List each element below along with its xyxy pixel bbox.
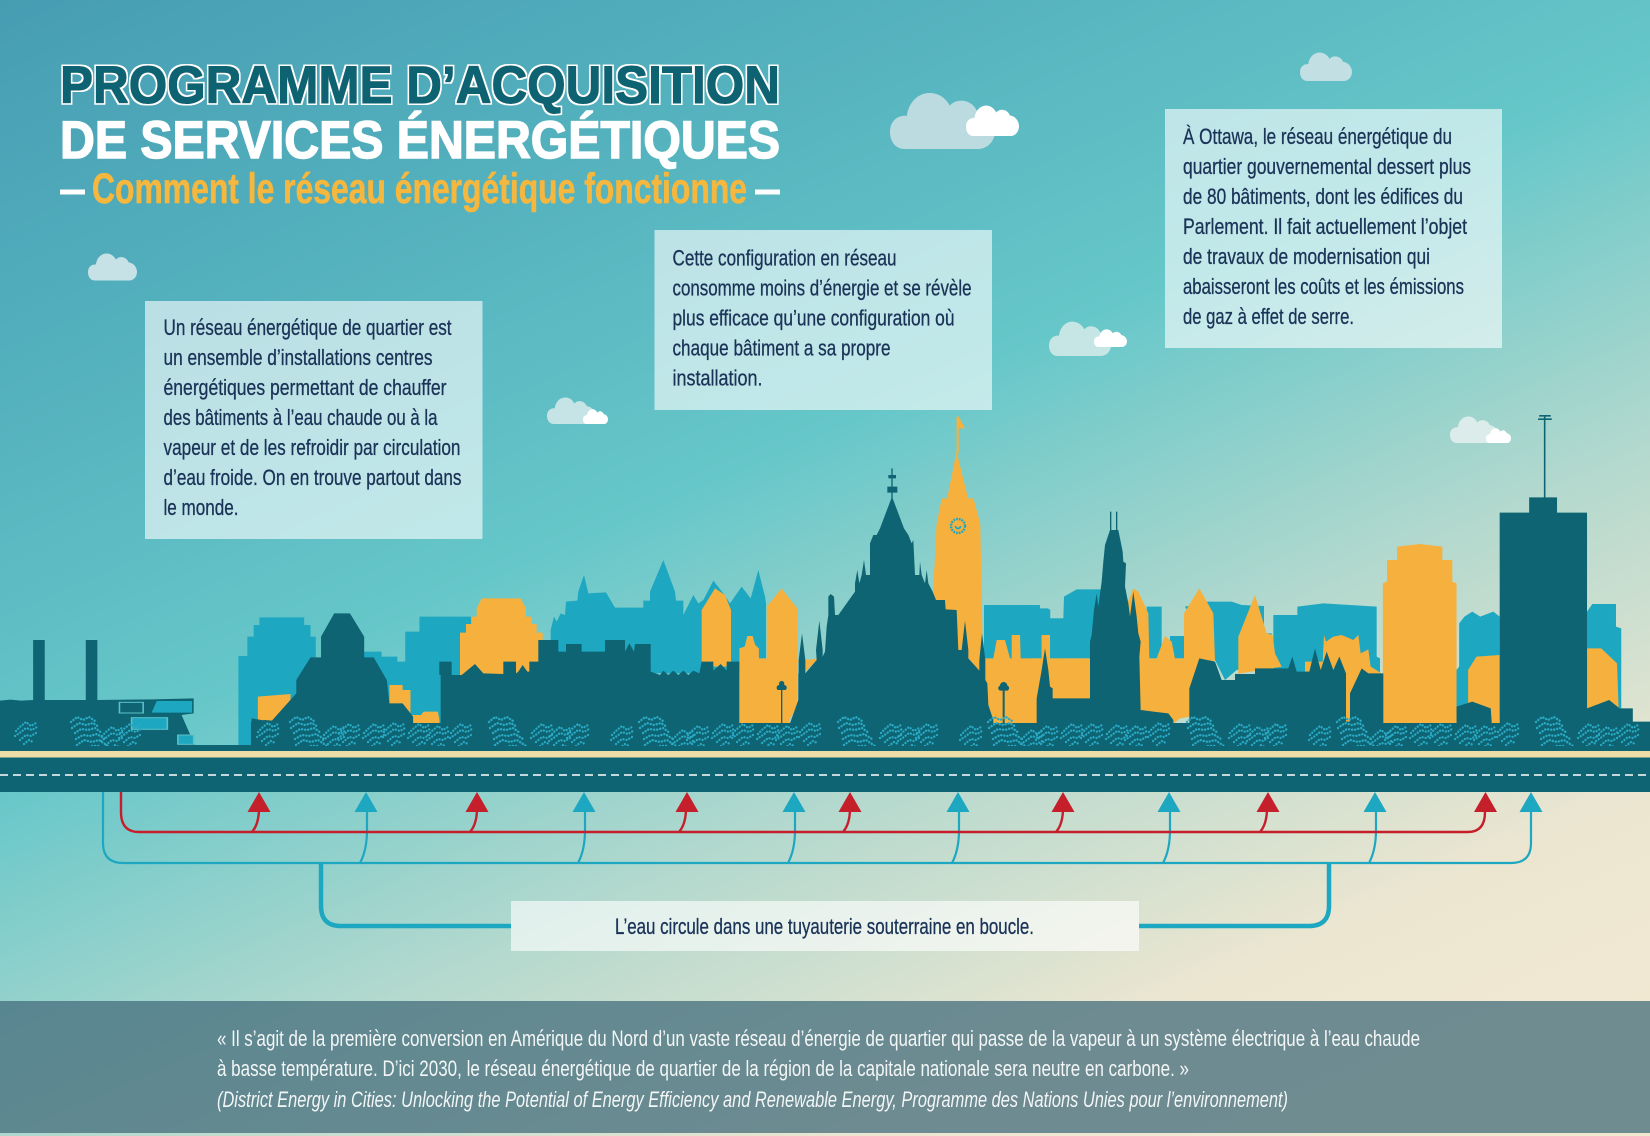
cloud: top right [1300,53,1352,81]
road / ground cross-section [0,746,1650,792]
text panel: what a district network is: des bâtiments à l’eau chaude ou à la [164,405,438,430]
text panel: what a district network is: le monde. [164,495,238,520]
caption: water loop [511,901,1139,951]
shrubs [15,717,1639,752]
text panel: what a district network is: vapeur et de les refroidir par circulation [164,435,460,460]
text panel: efficiency: Cette configuration en réseau [672,246,896,270]
text panel: efficiency: consomme moins d’énergie et se révèle [672,276,972,300]
text panel: Ottawa [1165,109,1502,348]
text panel: Ottawa: À Ottawa, le réseau énergétique du [1183,124,1452,149]
text panel: efficiency: chaque bâtiment a sa propre [672,336,890,360]
text panel: efficiency: installation. [672,366,762,390]
chateau roofline [252,613,413,747]
Ottawa skyline [0,415,1650,752]
clock tower and flag [933,417,984,733]
east block [1189,648,1383,750]
text panel: Ottawa: de travaux de modernisation qui [1183,244,1430,269]
title line 1: PROGRAMME D’ACQUISITION [60,56,780,115]
quote text line 2: à basse température. D’ici 2030, le réseau énergétique de quartier de la région de la capitale nationale sera neutre en carbone. » [217,1056,1189,1081]
title line 2: DE SERVICES ÉNERGÉTIQUES [60,110,780,170]
blue feed pipes to caption [321,863,1329,926]
quote band [0,1001,1650,1133]
clouds [88,53,1511,443]
text panel: Ottawa: Parlement. Il fait actuellement l’objet [1183,214,1468,239]
text panel: Ottawa: de gaz à effet de serre. [1183,304,1354,329]
west block battlements [439,640,739,730]
blue background buildings [238,560,1621,747]
cloud: small above box one [547,397,608,424]
red branches [252,808,1267,832]
pipe network [103,792,1531,926]
orange buildings [258,417,1619,750]
quote source: (District Energy in Cities: Unlocking the Potential of Energy Efficiency and Renewable Energy, Programme des Nations Unies pour l’environnement) [217,1087,1288,1112]
blue branches [360,810,1376,863]
blue loop pipe [103,792,1531,863]
text panel: Ottawa: quartier gouvernemental dessert plus [1183,154,1471,179]
dark foreground buildings [0,415,1650,750]
text panel: Ottawa: de 80 bâtiments, dont les édifices du [1183,184,1463,209]
text panel: what a district network is [145,301,482,539]
text panel: what a district network is: un ensemble d’installations centres [164,345,432,370]
red arrowheads [248,792,1497,812]
blue arrowheads [354,792,1542,812]
clock face [951,519,965,533]
east tower group [1457,415,1650,750]
subtitle with dashes: Comment le réseau énergétique fonctionne [92,165,747,213]
planting band [251,720,1650,750]
text panel: efficiency: plus efficace qu’une configuration où [672,306,954,330]
cloud: centre right [1049,322,1127,356]
power plant with chimneys [0,613,413,750]
text panel: what a district network is: énergétiques permettant de chauffer [164,375,447,400]
text panel: what a district network is: Un réseau énergétique de quartier est [164,315,452,340]
text panel: efficiency [654,230,992,410]
text panel: Ottawa: abaisseront les coûts et les émissions [1183,274,1464,299]
title block [60,56,780,213]
caption: water loop: L’eau circule dans une tuyauterie souterraine en boucle. [615,914,1034,939]
cloud: right near tower [1450,416,1511,443]
cloud: left [88,254,137,280]
cloud: large with white puff [890,93,1019,149]
gothic tower and spires [1037,512,1173,750]
text panel: what a district network is: d’eau froide. On en trouve partout dans [164,465,462,490]
lamp posts [777,681,1009,727]
centre block with pavilion [790,468,993,747]
red loop pipe [121,792,1485,832]
